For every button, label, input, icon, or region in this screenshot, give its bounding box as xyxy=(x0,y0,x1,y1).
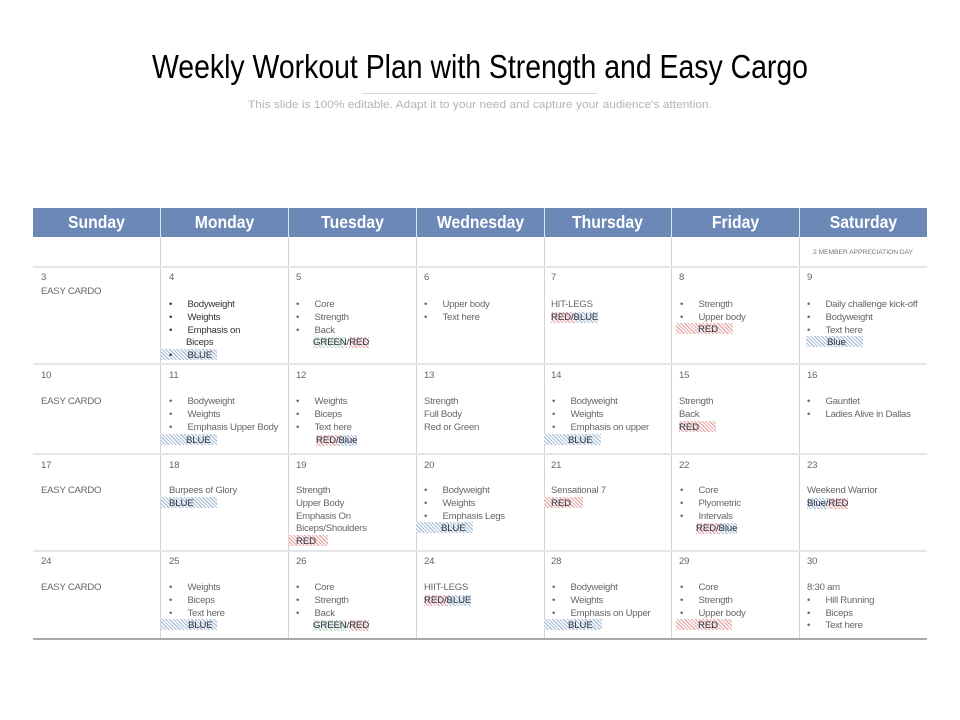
cell: day 15: Back xyxy=(679,409,699,420)
header row: days of week xyxy=(33,208,927,237)
cell: day 6 xyxy=(424,272,490,323)
note: member appreciation day: 2 MEMBER APPRECIATION DAY xyxy=(813,249,913,256)
cell: day 25: • xyxy=(169,595,172,606)
cell: day 26: 26 xyxy=(296,556,306,567)
cell: day 14: • xyxy=(552,409,555,420)
cell: day 5: Core xyxy=(314,299,334,310)
cell: day 6: Text here xyxy=(442,312,480,323)
cell: day 6: • xyxy=(424,312,427,323)
cell: day 7: HIT-LEGS xyxy=(551,299,593,310)
cell: day 19: Biceps/Shoulders xyxy=(296,523,367,534)
cell: day 8: • xyxy=(680,312,683,323)
cell: day 13: Red or Green xyxy=(424,422,479,433)
cell: day 26: Strength xyxy=(314,595,349,606)
cell: day 12: RED/Blue xyxy=(316,435,357,446)
cell: day 14 xyxy=(544,370,650,446)
cell: day 19: Emphasis On xyxy=(296,511,351,522)
cell: day 19 xyxy=(289,460,367,547)
cell: day 30: • xyxy=(807,595,810,606)
cell: day 9 xyxy=(806,272,918,348)
cell: day 11: Bodyweight xyxy=(188,396,235,407)
cell: day 3: EASY CARDO xyxy=(41,286,101,297)
cell: day 4: • xyxy=(169,325,172,336)
cell: day 25: Biceps xyxy=(188,595,215,606)
cell: day 22: • xyxy=(680,511,683,522)
cell: day 4 xyxy=(161,272,240,361)
cell: day 14: Weights xyxy=(570,409,603,420)
cell: day 16: • xyxy=(807,396,810,407)
cell: day 13: 13 xyxy=(424,370,434,381)
day: Monday: Monday xyxy=(195,212,254,232)
cell: day 13: Full Body xyxy=(424,409,462,420)
cell: day 12: Weights xyxy=(314,396,347,407)
cell: day 24: EASY CARDO xyxy=(41,582,101,593)
cell: day 20: • xyxy=(424,485,427,496)
cell: day 15: 15 xyxy=(679,370,689,381)
cell: day 5: GREEN/RED xyxy=(313,337,369,348)
cell: day 20: • xyxy=(424,511,427,522)
cell: day 25: • xyxy=(169,608,172,619)
cell: day 9: Bodyweight xyxy=(826,312,873,323)
cell: day 25: 25 xyxy=(169,556,179,567)
cell: day 28: Bodyweight xyxy=(570,582,618,593)
day: Thursday: Thursday xyxy=(572,212,643,232)
cell: day 11: BLUE xyxy=(186,435,211,446)
cell: day 19: 19 xyxy=(296,460,306,471)
cell: day 24 (HIIT-LEGS) xyxy=(424,556,471,606)
cell: day 29: 29 xyxy=(679,556,689,567)
cell: day 5: • xyxy=(296,299,299,310)
cell: day 28: BLUE xyxy=(568,620,593,631)
cell: day 22: Core xyxy=(698,485,718,496)
day: Sunday: Sunday xyxy=(68,212,125,232)
cell: day 12: Biceps xyxy=(314,409,342,420)
cell: day 17: 17 xyxy=(41,460,51,471)
cell: day 8: 8 xyxy=(679,272,684,283)
cell: day 7 xyxy=(551,272,598,323)
cell: day 19: Strength xyxy=(296,485,330,496)
cell: day 18: BLUE xyxy=(169,498,194,509)
day: Friday: Friday xyxy=(712,212,759,232)
cell: day 20: 20 xyxy=(424,460,434,471)
cell: day 22: • xyxy=(680,498,683,509)
cell: day 29: Core xyxy=(698,582,718,593)
cell: day 14: • xyxy=(552,422,555,433)
cell: day 6: Upper body xyxy=(442,299,490,310)
cell: day 6: • xyxy=(424,299,427,310)
cell: day 16: • xyxy=(807,409,810,420)
cell: day 15: Strength xyxy=(679,396,713,407)
cell: day 25: Weights xyxy=(188,582,220,593)
cell: day 30: 8:30 am xyxy=(807,582,840,593)
cell: day 10: 10 xyxy=(41,370,51,381)
cell: day 14: BLUE xyxy=(568,435,593,446)
cell: day 21: RED xyxy=(551,498,571,509)
cell: day 18 xyxy=(161,460,238,509)
cell: day 13: Strength xyxy=(424,396,458,407)
cell: day 29: Strength xyxy=(698,595,733,606)
cell: day 8: Strength xyxy=(698,299,733,310)
cell: day 28: Weights xyxy=(570,595,603,606)
cell: day 4: • xyxy=(169,350,172,361)
cell: day 15 xyxy=(679,370,716,433)
day: Saturday: Saturday xyxy=(830,212,897,232)
cell: day 20: BLUE xyxy=(441,523,466,534)
cell: day 4: Weights xyxy=(188,312,220,323)
cell: day 6: 6 xyxy=(424,272,429,283)
cell: day 28 xyxy=(544,556,651,631)
cell: day 30: 30 xyxy=(807,556,817,567)
cell: day 30: Text here xyxy=(826,620,863,631)
cell: day 21: Sensational 7 xyxy=(551,485,606,496)
cell: day 23 xyxy=(807,460,878,509)
cell: day 29: • xyxy=(680,595,683,606)
cell: day 23: Blue/RED xyxy=(807,498,848,509)
cell: day 28: • xyxy=(552,582,555,593)
cell: day 15: RED xyxy=(679,422,699,433)
cell: day 23: 23 xyxy=(807,460,817,471)
cell: day 26: • xyxy=(296,608,299,619)
cell: day 22 xyxy=(679,460,741,534)
cell: day 18: Burpees of Glory xyxy=(169,485,237,496)
cell: day 16: Gauntlet xyxy=(826,396,860,407)
cell: day 24 xyxy=(41,556,101,593)
cell: day 7: RED/BLUE xyxy=(551,312,598,323)
cell: day 12: Text here xyxy=(314,422,352,433)
cell: day 28: Emphasis on Upper xyxy=(570,608,651,619)
cell: day 20: Bodyweight xyxy=(442,485,490,496)
cell: day 5: Strength xyxy=(314,312,349,323)
cell: day 30: Biceps xyxy=(826,608,853,619)
title: Weekly Workout Plan with Strength and Easy Cargo xyxy=(152,49,808,86)
cell: day 14: Emphasis on upper xyxy=(570,422,649,433)
cell: day 17 xyxy=(41,460,101,496)
cell: day 11: 11 xyxy=(169,370,178,381)
cell: day 21 xyxy=(544,460,606,509)
cell: day 5 xyxy=(296,272,369,348)
cell: day 13 xyxy=(424,370,479,433)
cell: day 10 xyxy=(41,370,101,407)
cell: day 30: Hill Running xyxy=(826,595,874,606)
cell: day 28: • xyxy=(552,595,555,606)
cell: day 24 (HIIT-LEGS): 24 xyxy=(424,556,434,567)
cell: day 26 xyxy=(296,556,369,631)
cell: day 12: • xyxy=(296,422,299,433)
cell: day 4: Bodyweight xyxy=(188,299,235,310)
cell: day 10: EASY CARDO xyxy=(41,396,101,407)
cell: day 20 xyxy=(416,460,505,534)
cell: day 4: 4 xyxy=(169,272,174,283)
day: Tuesday: Tuesday xyxy=(321,212,384,232)
cell: day 16: 16 xyxy=(807,370,817,381)
day: Wednesday: Wednesday xyxy=(437,212,524,232)
cell: day 4: Emphasis on xyxy=(188,325,240,336)
cell: day 29: RED xyxy=(698,620,718,631)
cell: day 25: BLUE xyxy=(188,620,213,631)
cell: day 28: 28 xyxy=(551,556,561,567)
cell: day 9: • xyxy=(807,299,810,310)
cell: day 14: • xyxy=(552,396,555,407)
cell: day 29 xyxy=(676,556,746,631)
cell: day 14: 14 xyxy=(551,370,561,381)
subtitle: This slide is 100% editable. Adapt it to your need and capture your audience's attention. xyxy=(248,99,712,111)
cell: day 16 xyxy=(807,370,911,420)
cell: day 20: Emphasis Legs xyxy=(442,511,505,522)
cell: day 26: Back xyxy=(314,608,335,619)
cell: day 29: Upper body xyxy=(698,608,746,619)
cell: day 8: • xyxy=(680,299,683,310)
cell: day 11: Weights xyxy=(188,409,220,420)
cell: day 25: • xyxy=(169,582,172,593)
cell: day 26: GREEN/RED xyxy=(313,620,369,631)
cell: day 5: • xyxy=(296,325,299,336)
cell: day 12: 12 xyxy=(296,370,306,381)
cell: day 12: • xyxy=(296,409,299,420)
cell: day 21: 21 xyxy=(551,460,561,471)
cell: day 26: • xyxy=(296,582,299,593)
cell: day 30: • xyxy=(807,620,810,631)
cell: day 22: • xyxy=(680,485,683,496)
cell: day 11 xyxy=(161,370,278,446)
cell: day 3: 3 xyxy=(41,272,46,283)
cell: day 11: • xyxy=(169,422,172,433)
cell: day 25 xyxy=(161,556,225,631)
cell: day 18: 18 xyxy=(169,460,179,471)
cell: day 16: Ladies Alive in Dallas xyxy=(826,409,911,420)
cell: day 25: Text here xyxy=(188,608,225,619)
cell: day 22: Intervals xyxy=(698,511,733,522)
cell: day 28: • xyxy=(552,608,555,619)
cell: day 3 xyxy=(41,272,101,297)
cell: day 17: EASY CARDO xyxy=(41,485,101,496)
cell: day 12: • xyxy=(296,396,299,407)
cell: day 5: • xyxy=(296,312,299,323)
cell: day 22: 22 xyxy=(679,460,689,471)
cell: day 22: Plyometric xyxy=(698,498,741,509)
cell: day 19: RED xyxy=(296,536,316,547)
cell: day 30: • xyxy=(807,608,810,619)
cell: day 12 xyxy=(296,370,357,446)
cell: day 9: Text here xyxy=(826,325,863,336)
cell: day 9: Blue xyxy=(827,337,846,348)
cell: day 24 (HIIT-LEGS): HIIT-LEGS xyxy=(424,582,468,593)
cell: day 11: • xyxy=(169,396,172,407)
cell: day 4: • xyxy=(169,312,172,323)
cell: day 8: Upper body xyxy=(698,312,746,323)
cell: day 8: RED xyxy=(698,324,718,335)
cell: day 4: • xyxy=(169,299,172,310)
cell: day 24 (HIIT-LEGS): RED/BLUE xyxy=(424,595,471,606)
cell: day 7: 7 xyxy=(551,272,556,283)
cell: day 9: • xyxy=(807,325,810,336)
cell: day 5: 5 xyxy=(296,272,301,283)
cell: day 29: • xyxy=(680,582,683,593)
cell: day 22: RED/Blue xyxy=(696,523,737,534)
cell: day 9: • xyxy=(807,312,810,323)
cell: day 20: Weights xyxy=(442,498,475,509)
cell: day 26: • xyxy=(296,595,299,606)
cell: day 11: • xyxy=(169,409,172,420)
cell: day 4: BLUE xyxy=(188,350,212,361)
cell: day 9: Daily challenge kick-off xyxy=(826,299,917,310)
cell: day 20: • xyxy=(424,498,427,509)
cell: day 23: Weekend Warrior xyxy=(807,485,877,496)
cell: day 4: Biceps xyxy=(186,337,213,348)
cell: day 9: 9 xyxy=(807,272,812,283)
cell: day 29: • xyxy=(680,608,683,619)
cell: day 5: Back xyxy=(314,325,335,336)
cell: day 26: Core xyxy=(314,582,334,593)
cell: day 30 xyxy=(807,556,874,631)
cell: day 8 xyxy=(676,272,746,335)
cell: day 14: Bodyweight xyxy=(570,396,618,407)
cell: day 24: 24 xyxy=(41,556,51,567)
cell: day 19: Upper Body xyxy=(296,498,344,509)
cell: day 11: Emphasis Upper Body xyxy=(188,422,278,433)
